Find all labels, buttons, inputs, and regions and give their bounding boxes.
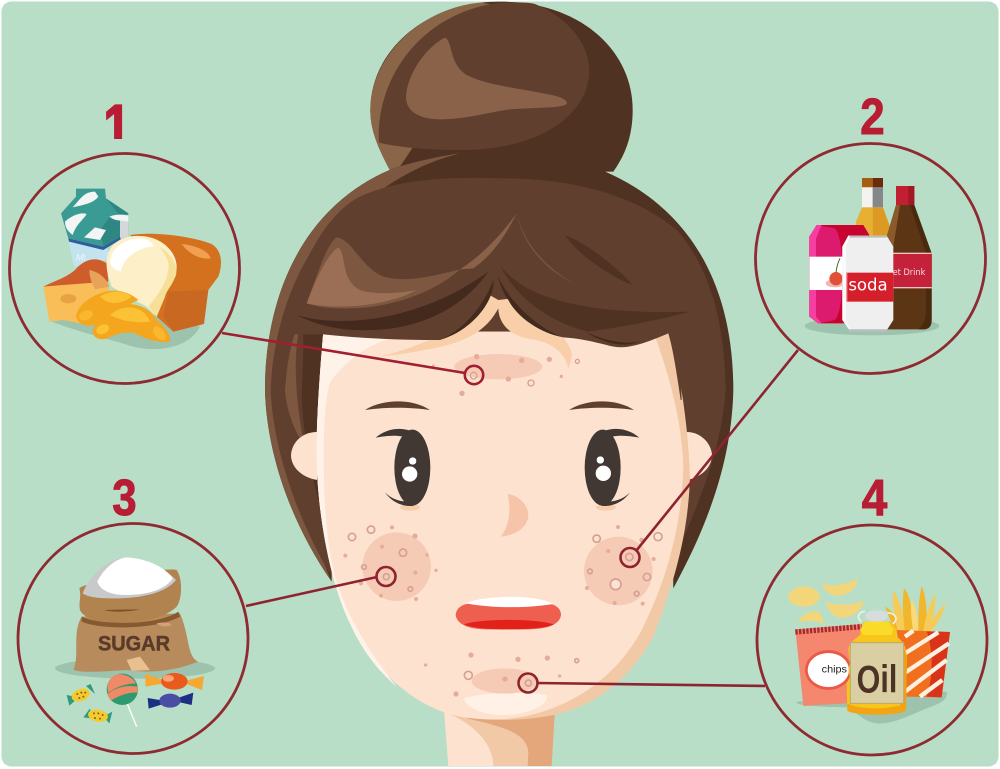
number 2: 2 [860, 89, 885, 146]
sugar sack: SUGAR [98, 631, 170, 655]
acne: cheeks and chin [343, 525, 662, 697]
left eyebrow [365, 401, 430, 410]
right ear [687, 432, 712, 480]
food group: bottles and cans [805, 178, 939, 335]
number 4: 4 [862, 470, 887, 527]
panel 3: sugar and sweets [18, 470, 248, 754]
blue candy [148, 693, 193, 709]
eyes [376, 429, 639, 629]
panel 1: dairy and bread [10, 92, 240, 383]
white soda can: soda [848, 276, 888, 295]
sugar sack [73, 557, 198, 672]
circle 4 [757, 525, 987, 755]
callout line 4 [518, 674, 765, 692]
oil bottle [847, 610, 907, 715]
hair bun [370, 2, 633, 173]
mouth [456, 597, 561, 629]
acne: forehead [432, 354, 579, 396]
right eyebrow [569, 401, 634, 410]
orange candy [145, 673, 204, 690]
circle 2 [756, 144, 986, 374]
chips bag [795, 624, 863, 706]
milk carton [61, 189, 128, 267]
woman's head illustration [265, 2, 733, 766]
cheese [43, 259, 110, 323]
chips bag: chips [822, 664, 847, 675]
callout line 3 [246, 567, 396, 606]
back hair and sides [265, 152, 733, 588]
yellow bottle [856, 178, 890, 237]
bread loaf [107, 234, 221, 332]
nose [501, 494, 528, 537]
circle 1 [10, 154, 240, 384]
callout line 1 [222, 333, 483, 384]
lollipop [107, 674, 138, 727]
oil bottle: Oil [857, 657, 897, 701]
yellow candies [67, 684, 112, 723]
brown bottle: et Drink [893, 268, 925, 278]
forehead shading and bangs [283, 178, 720, 400]
croissant [76, 291, 170, 342]
neck [444, 710, 555, 766]
left eye [376, 429, 430, 511]
fries carton [897, 630, 950, 697]
circle 3 [18, 524, 248, 754]
fries [885, 586, 946, 633]
food group: sugar sack and candies [55, 557, 215, 727]
number 1: 1 [104, 92, 130, 161]
right eye [585, 429, 639, 511]
food group: chips, fries, oil [788, 578, 950, 724]
brown bottle [887, 186, 932, 329]
panel 4: fried and oily food [757, 470, 987, 755]
callout line 2 [620, 350, 798, 567]
left ear [291, 432, 317, 480]
food group: milk, cheese, bread, croissant [43, 189, 221, 349]
panel 2: sugary drinks [756, 89, 986, 374]
white soda can [842, 236, 893, 332]
pink can [809, 225, 869, 323]
number 3: 3 [112, 470, 137, 527]
face [317, 332, 690, 720]
milk carton: Mi [76, 253, 87, 263]
chips [788, 578, 864, 624]
